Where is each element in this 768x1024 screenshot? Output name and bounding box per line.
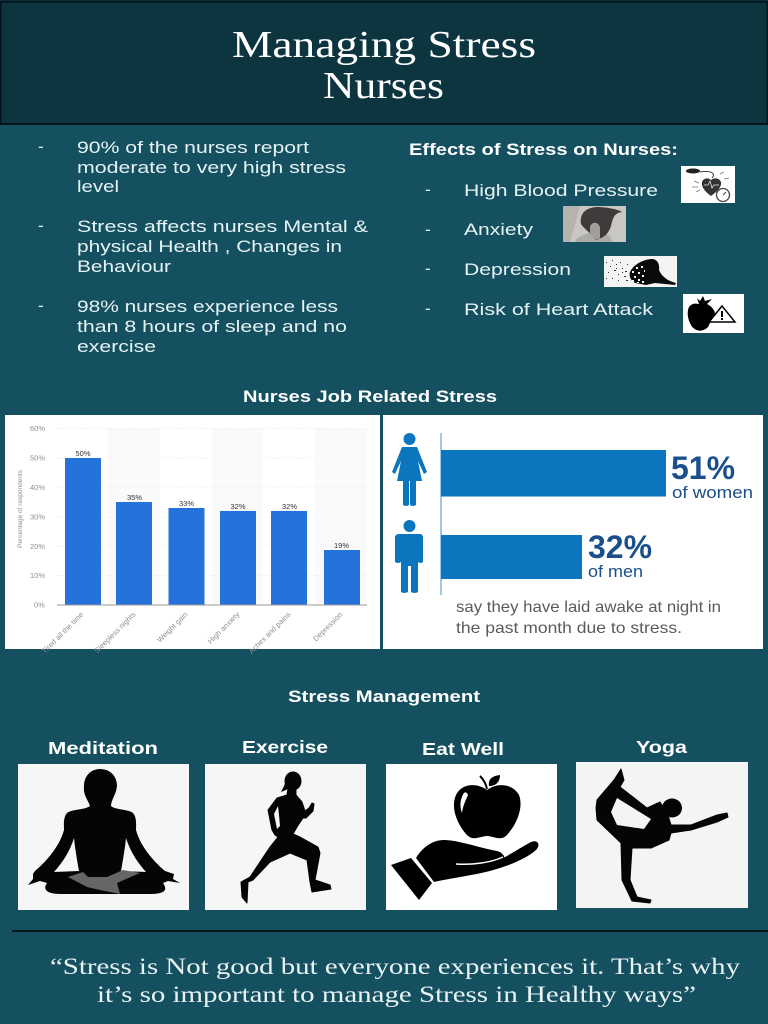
text block: stress facts (38, 137, 369, 356)
text block: stress facts: level (77, 177, 119, 196)
icon: apple (454, 775, 521, 838)
y axis labels: 50% (30, 454, 45, 462)
panel: meditation (18, 764, 189, 910)
label: eat well: Eat Well (422, 739, 504, 759)
text block: stress facts: Behaviour (77, 257, 171, 276)
quote (50, 954, 741, 1007)
category labels: Depression (311, 610, 344, 643)
value labels: 50% (75, 449, 91, 458)
y axis labels: 20% (30, 542, 45, 551)
panel: sleepless stat (383, 415, 763, 649)
heading: effects of stress: Effects of Stress on Nurses: (409, 141, 678, 159)
category labels: Sleepless nights (92, 610, 138, 655)
title: Managing Stress (232, 24, 536, 66)
category labels (40, 610, 344, 656)
icon: depression (604, 256, 677, 287)
stat: women (671, 450, 753, 502)
text block: stress facts: than 8 hours of sleep and no (77, 317, 347, 336)
label: meditation: Meditation (48, 738, 158, 758)
caption: the past month due to stress. (456, 620, 682, 637)
caption: say they have laid awake at night in (456, 599, 721, 616)
value labels: 32% (282, 502, 297, 511)
text block: stress facts: Stress affects nurses Mental & (77, 217, 369, 236)
y axis labels: 30% (30, 512, 45, 522)
stat: men: 32% (588, 529, 652, 565)
text block: effects list: - (425, 180, 431, 199)
text block: effects list: Anxiety (464, 220, 534, 239)
icon: anxious woman photo (563, 206, 626, 242)
panel: yoga (576, 762, 748, 908)
text block: effects list: - (425, 220, 431, 239)
heading: job related stress: Nurses Job Related Stress (243, 388, 497, 406)
bars (65, 458, 360, 605)
value labels: 32% (230, 502, 246, 511)
icon: blood pressure (681, 166, 735, 203)
text block: effects list: - (425, 299, 431, 318)
text block: stress facts: moderate to very high stress (77, 158, 346, 177)
value labels: 19% (334, 541, 349, 550)
stat: women: of women (672, 483, 753, 502)
caption (456, 599, 721, 637)
text block: effects list: Risk of Heart Attack (464, 300, 654, 319)
bar: women (441, 450, 666, 496)
text block: stress facts: - (38, 216, 44, 235)
text block: stress facts: - (38, 296, 44, 315)
value labels: 33% (179, 499, 194, 508)
text block: stress facts: 98% nurses experience less (77, 297, 338, 316)
y axis labels: 0% (34, 600, 45, 610)
stat: men: of men (588, 562, 643, 581)
y axis labels: 10% (30, 571, 45, 580)
heading: stress management: Stress Management (288, 688, 481, 706)
bar: men (441, 535, 582, 579)
category labels: Tired all the time (40, 610, 85, 655)
quote: “Stress is Not good but everyone experiences it. That’s why (50, 954, 741, 979)
y axis labels: Percentage of respondents (17, 469, 24, 548)
icon: heart warning (683, 294, 744, 333)
y axis labels: 40% (30, 483, 45, 492)
stat: women: 51% (671, 450, 735, 486)
text block: effects list: Depression (464, 260, 571, 279)
category labels: Aches and pains (247, 610, 293, 656)
icon: man (395, 520, 423, 593)
label: yoga: Yoga (636, 737, 687, 757)
text block: stress facts: - (38, 137, 44, 156)
category labels: High anxiety (206, 610, 242, 646)
panel: eat well (386, 764, 557, 910)
text block: stress facts: physical Health , Changes in (77, 237, 342, 256)
panel: exercise (205, 764, 366, 910)
value labels (75, 449, 349, 550)
category labels: Weight gain (155, 610, 189, 644)
text block: stress facts: 90% of the nurses report (77, 138, 309, 157)
text block: effects list: High Blood Pressure (464, 181, 658, 200)
panel: bar chart (5, 415, 380, 656)
text block: stress facts: exercise (77, 337, 156, 356)
value labels: 35% (127, 493, 142, 502)
label: exercise: Exercise (242, 737, 328, 757)
text block: effects list (425, 180, 658, 319)
text block: effects list: - (425, 259, 431, 278)
title: Nurses (323, 65, 444, 107)
stat: men (588, 529, 652, 581)
quote: it’s so important to manage Stress in Healthy ways” (97, 982, 696, 1007)
title (0, 2, 768, 124)
y axis labels (17, 424, 45, 610)
y axis labels: 60% (30, 424, 45, 433)
icon: woman (392, 433, 427, 506)
icon: hand (391, 840, 538, 900)
